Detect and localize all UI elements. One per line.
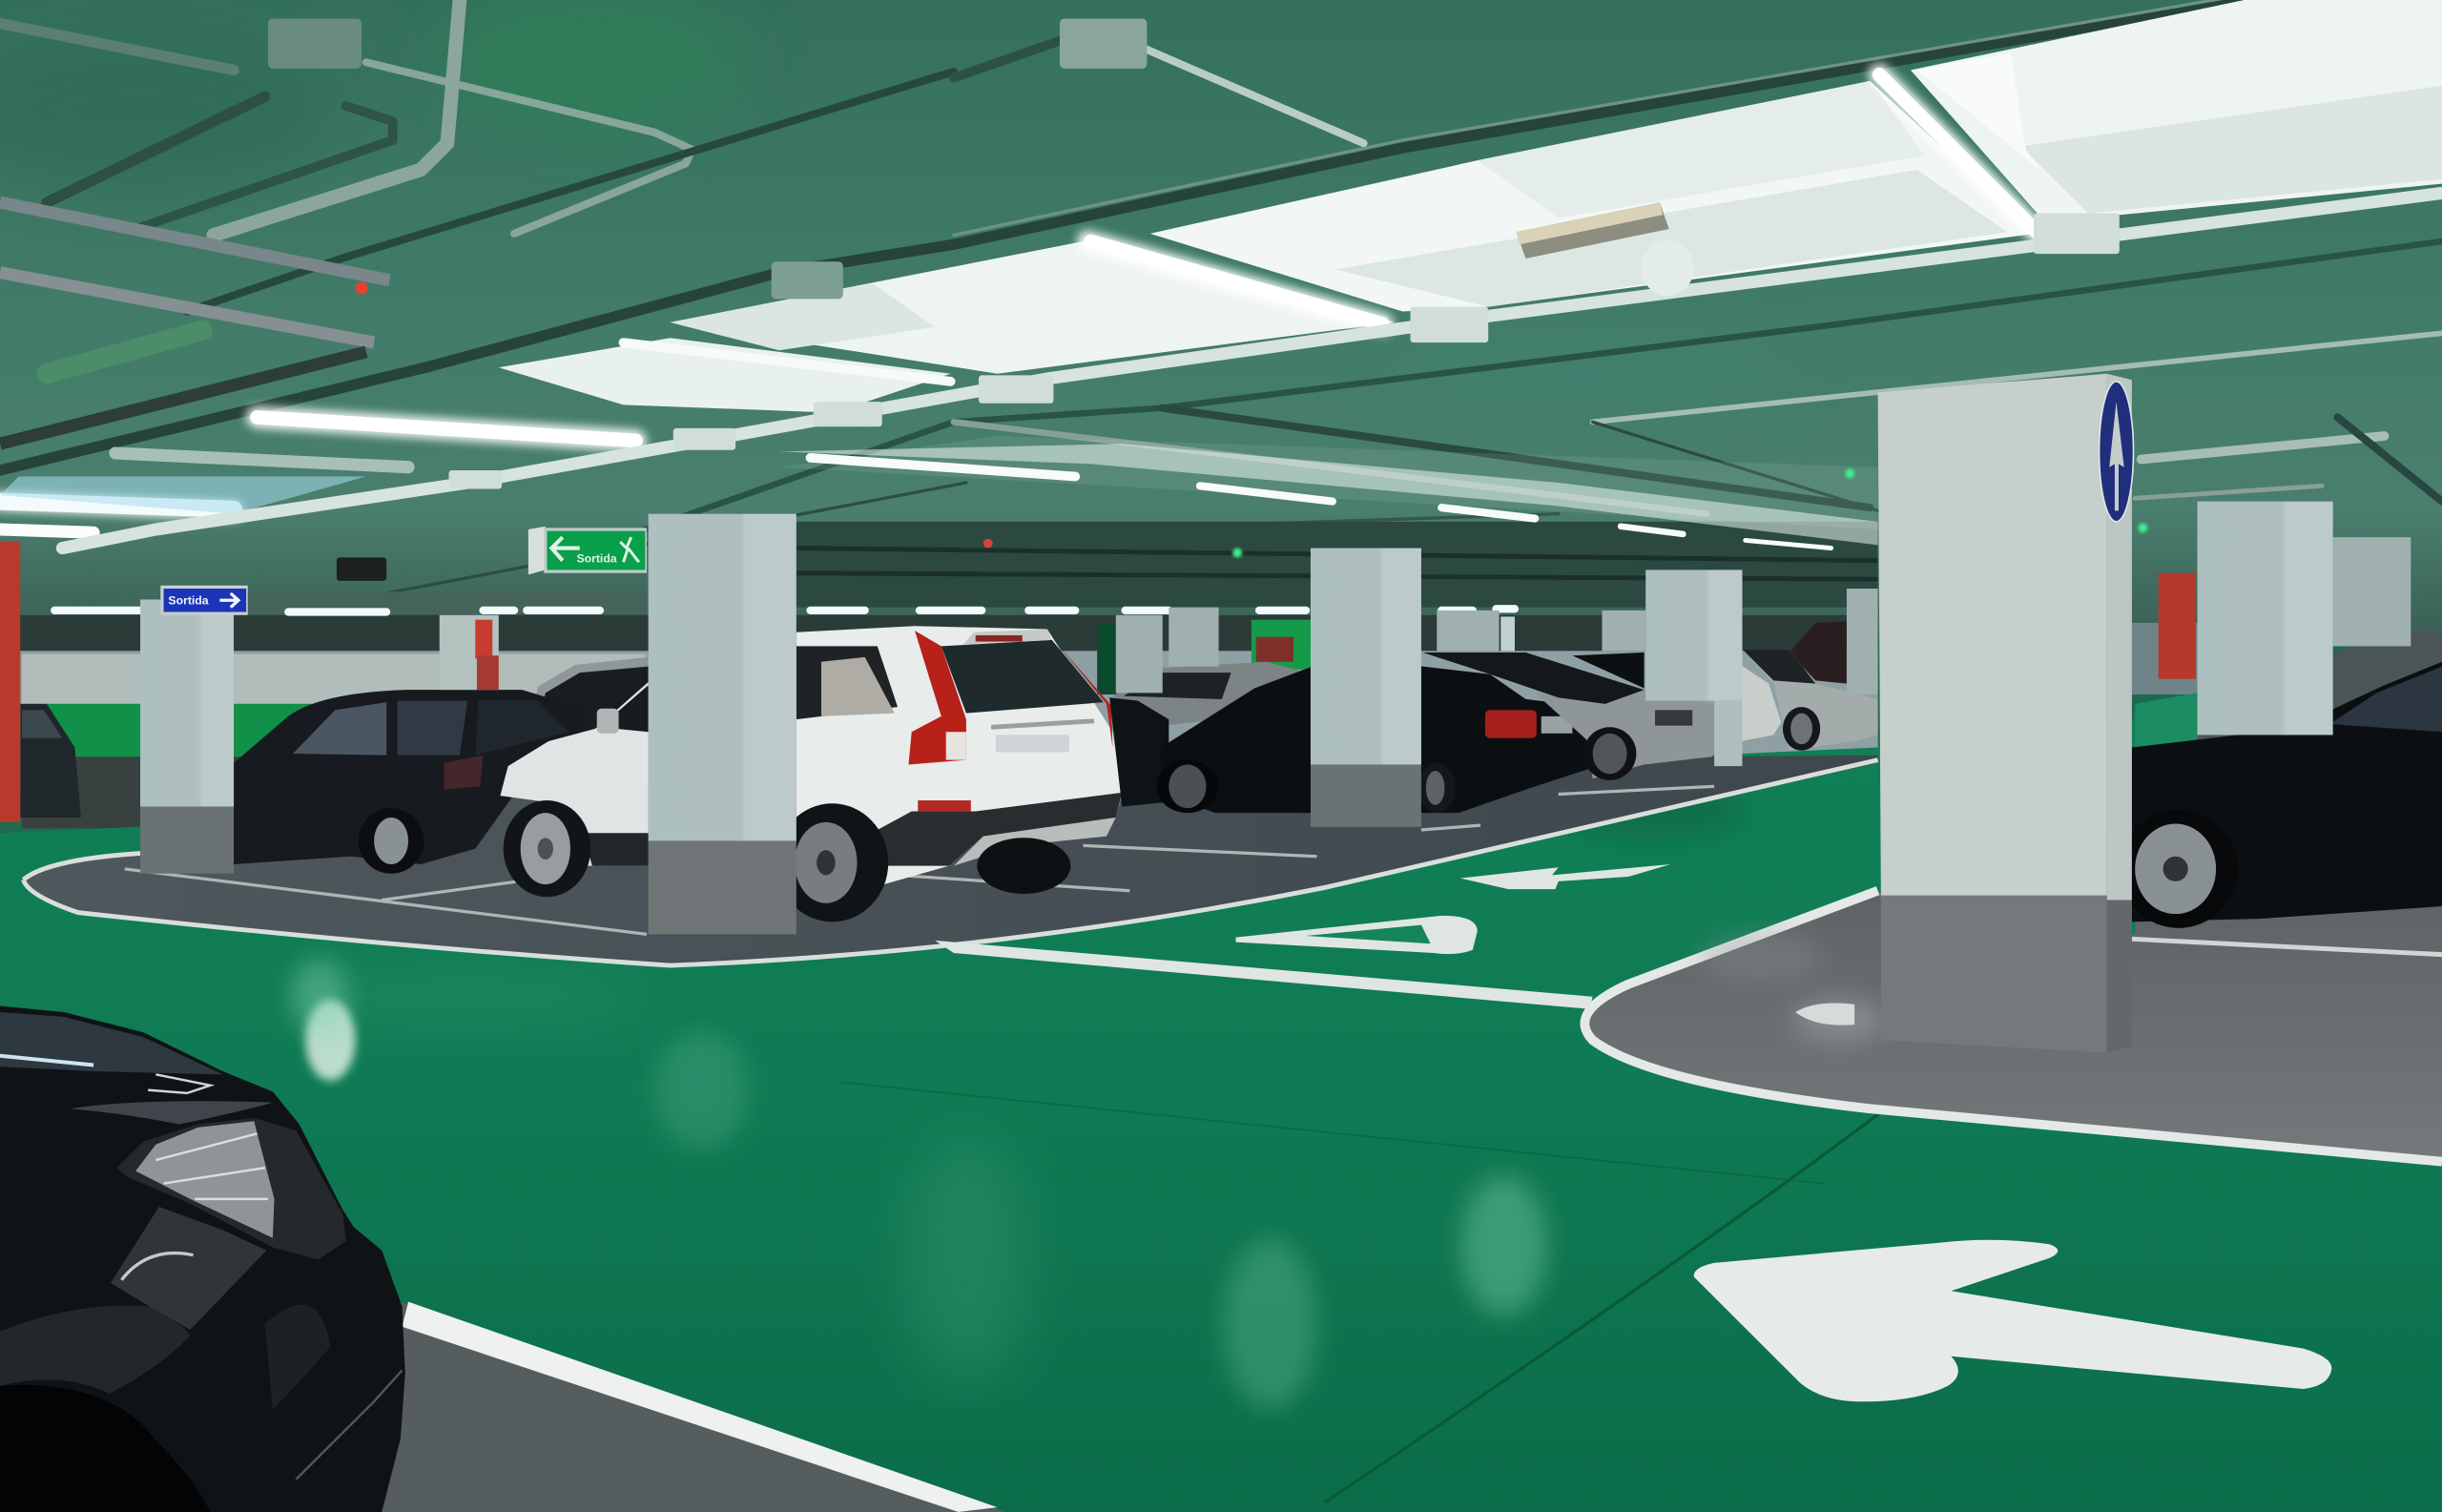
one-way blue sign	[2100, 382, 2134, 522]
fluorescent tubes	[0, 74, 2038, 549]
ceiling conduits and trunking	[0, 0, 2442, 611]
car: dark SUV behind	[529, 657, 649, 732]
car: dark hatchback	[234, 690, 585, 874]
mounting brackets	[268, 19, 2120, 489]
light panel left centre	[499, 338, 951, 413]
far ceiling strip lights	[54, 609, 1515, 612]
front body	[500, 682, 649, 866]
lower left grey floor	[382, 1295, 1005, 1512]
car: grey car, far right	[2333, 631, 2442, 719]
light panel upper centre	[1150, 81, 2036, 311]
red far-left pillar	[0, 542, 20, 822]
rear body	[797, 626, 1122, 887]
floor	[0, 685, 2442, 1512]
far columns	[440, 537, 2411, 694]
car: dark red van	[1789, 621, 1847, 684]
cars	[20, 621, 2442, 928]
column A	[140, 599, 234, 874]
car: silver saloon	[1423, 652, 1733, 780]
car: white SUV	[500, 626, 1122, 922]
status lights	[1232, 468, 2147, 557]
fender	[111, 1207, 266, 1330]
tube glow	[0, 74, 2038, 510]
ceiling light panels	[0, 0, 2442, 549]
white trunking	[62, 193, 2442, 549]
exit sign: green: Sortida	[576, 551, 617, 565]
ceiling	[0, 0, 2442, 654]
ceiling camera	[337, 557, 386, 581]
far arrow marking	[1460, 864, 1670, 889]
hood highlights	[0, 1012, 223, 1074]
light panel far right	[1911, 0, 2442, 218]
far ceiling grid glow	[779, 444, 1878, 545]
car: silver sedan	[1742, 650, 1878, 751]
parking island, left	[24, 756, 1878, 965]
ceiling-mounted sensor	[1517, 202, 1694, 296]
large white arrow	[1694, 1240, 2331, 1401]
parking island, right	[1584, 693, 2442, 1162]
columns	[0, 374, 2411, 1052]
column C	[1311, 549, 1421, 827]
lower left white line	[402, 1302, 998, 1512]
grey cable trunking, left	[0, 202, 389, 444]
wheel arch	[0, 1385, 211, 1512]
car: black sedan	[1109, 667, 1591, 813]
column D	[1645, 570, 1742, 766]
back wall	[0, 609, 2198, 828]
floor reflections	[280, 778, 1746, 1409]
column B	[649, 514, 797, 934]
lane line	[935, 941, 1593, 1009]
car: far-left dark hatchback	[20, 704, 81, 818]
car: silver far sedan	[1112, 662, 1313, 726]
car: black right sedan	[2120, 662, 2442, 928]
wheels	[504, 800, 590, 897]
exit sign: blue	[160, 586, 248, 615]
car: white sedan	[1741, 665, 1781, 741]
foreground black car	[0, 1005, 405, 1512]
exit sign: green	[528, 527, 647, 574]
exit sign: blue: Sortida	[168, 593, 209, 607]
light panel centre	[670, 241, 1395, 374]
red far-right pillar	[2159, 573, 2196, 679]
small arrow marking	[1236, 916, 1478, 954]
column E	[1878, 374, 2134, 1052]
column F	[2198, 502, 2333, 735]
headlight	[117, 1118, 346, 1260]
